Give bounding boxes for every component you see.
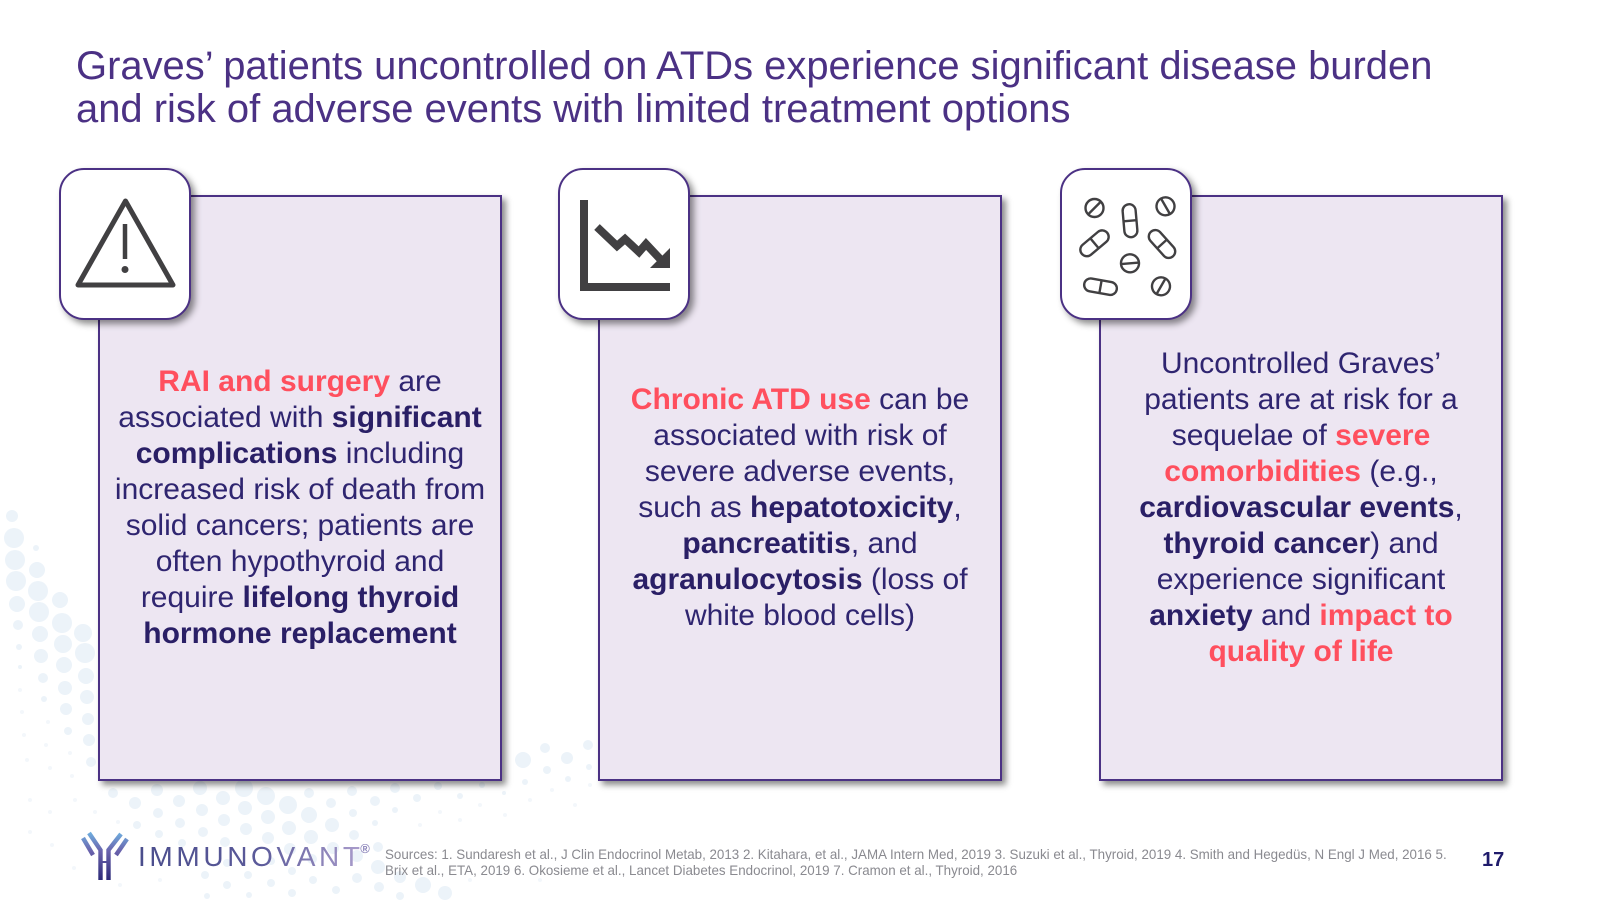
text block: severe comorbidities: patients are at risk for a (1144, 383, 1458, 416)
text block: RAI and surgery: require lifelong thyroid (141, 581, 459, 614)
icon: antibody mark (83, 833, 127, 880)
text block: RAI and surgery: solid cancers; patients are (126, 509, 474, 542)
panel background and text (1099, 195, 1503, 781)
text block: chronic ATD use: severe adverse events, (645, 455, 955, 488)
panel background and text (598, 195, 1002, 781)
registered mark: ® (360, 841, 370, 856)
page number: 17 (1482, 849, 1504, 871)
text block: severe comorbidities: quality of life (1208, 635, 1394, 668)
text block: chronic ATD use: agranulocytosis (loss of (632, 563, 968, 596)
text block: chronic ATD use: Chronic ATD use can be (631, 383, 969, 416)
text block: RAI and surgery: increased risk of death from (115, 473, 485, 506)
sources footnote (385, 847, 1447, 878)
text block: RAI and surgery: complications including (136, 437, 464, 470)
text block: severe comorbidities: experience significant (1157, 563, 1445, 596)
text block: severe comorbidities: Uncontrolled Graves’ (1161, 347, 1441, 380)
text block: severe comorbidities: cardiovascular events, (1139, 491, 1463, 524)
text block: severe comorbidities (1139, 347, 1463, 668)
icon: warning triangle (59, 168, 191, 320)
text block: chronic ATD use (631, 383, 969, 632)
sources footnote: Sources: 1. Sundaresh et al., J Clin Endocrinol Metab, 2013 2. Kitahara, et al., JAMA Intern Med, 2019 3. Suzuki et al., Thyroid, 2019 4. Smith and Hegedüs, N Engl J Med, 2016 5. (385, 847, 1447, 862)
sources footnote: Brix et al., ETA, 2019 6. Okosieme et al., Lancet Diabetes Endocrinol, 2019 7. Cramon et al., Thyroid, 2016 (385, 863, 1017, 878)
text block: RAI and surgery: associated with significant (118, 401, 482, 434)
title: Graves’ patients uncontrolled on ATDs experience significant disease burden (76, 44, 1432, 88)
title: and risk of adverse events with limited treatment options (76, 87, 1070, 131)
text block: severe comorbidities: comorbidities (e.g., (1164, 455, 1438, 488)
text block: RAI and surgery: RAI and surgery are (158, 365, 442, 398)
icon: assorted pills (1060, 168, 1192, 320)
text block: chronic ATD use: pancreatitis, and (682, 527, 918, 560)
text block: chronic ATD use: such as hepatotoxicity, (638, 491, 962, 524)
title (76, 44, 1432, 131)
logo: Immunovant (81, 832, 370, 880)
text block: severe comorbidities: thyroid cancer) and (1163, 527, 1439, 560)
text block: RAI and surgery: often hypothyroid and (156, 545, 444, 578)
panel: RAI and surgery complications (58, 168, 510, 790)
logo wordmark: IMMUNOVANT (138, 841, 360, 872)
text block: RAI and surgery (115, 365, 485, 650)
text block: chronic ATD use: white blood cells) (685, 599, 915, 632)
text block: RAI and surgery: hormone replacement (143, 617, 457, 650)
text block: severe comorbidities: anxiety and impact to (1149, 599, 1453, 632)
panel: severe comorbidities (1060, 168, 1512, 790)
text block: chronic ATD use: associated with risk of (653, 419, 947, 452)
panel background and text (98, 195, 502, 781)
icon: declining chart (558, 168, 690, 320)
text block: severe comorbidities: sequelae of severe (1172, 419, 1430, 452)
panel: chronic ATD use (558, 168, 1010, 790)
